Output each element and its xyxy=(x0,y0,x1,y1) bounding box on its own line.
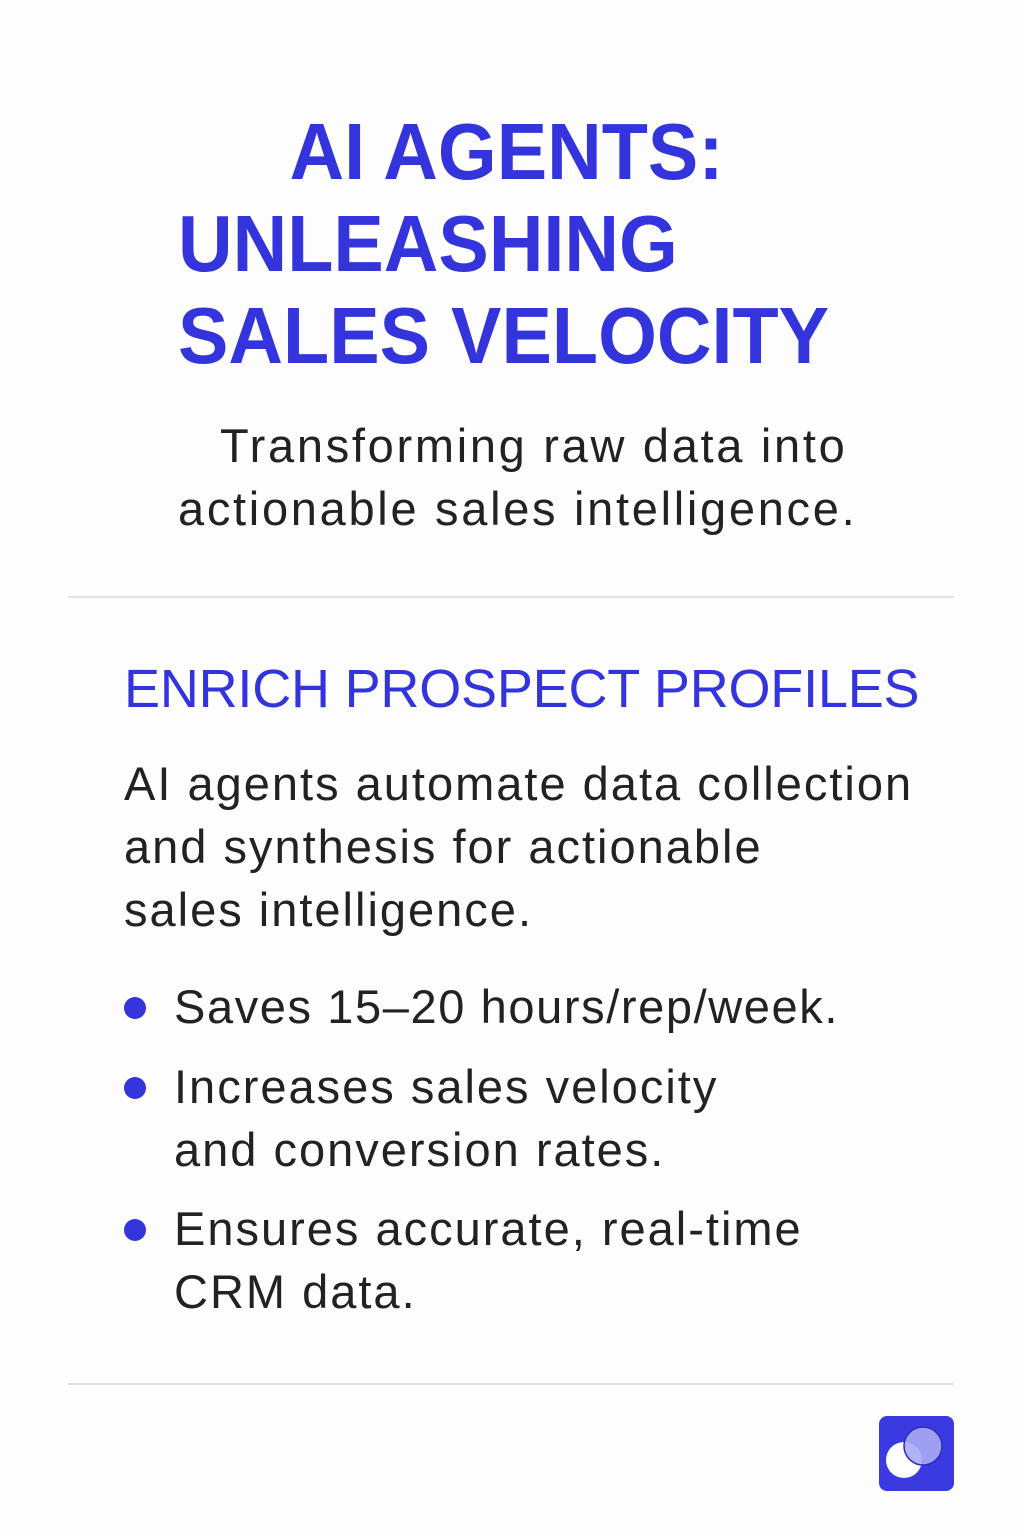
bullet list xyxy=(124,980,839,1318)
title: SALES VELOCITY xyxy=(178,291,829,380)
icon: logo xyxy=(879,1416,954,1491)
body text xyxy=(124,757,913,936)
body text: sales intelligence. xyxy=(124,883,533,936)
title: AI AGENTS: xyxy=(290,107,724,196)
bullet 2 xyxy=(124,1060,718,1176)
bullet 3 xyxy=(124,1202,803,1318)
bullet 3: CRM data. xyxy=(174,1265,417,1318)
body text: and synthesis for actionable xyxy=(124,820,763,873)
bullet 3: Ensures accurate, real-time xyxy=(174,1202,803,1255)
title: UNLEASHING xyxy=(178,199,678,288)
bullet 1: Saves 15–20 hours/rep/week. xyxy=(174,980,839,1033)
title xyxy=(178,107,829,380)
bullet 2: Increases sales velocity xyxy=(174,1060,718,1113)
subtitle xyxy=(178,419,857,535)
subtitle: Transforming raw data into xyxy=(220,419,847,472)
subtitle: actionable sales intelligence. xyxy=(178,482,857,535)
body text: AI agents automate data collection xyxy=(124,757,913,810)
bullet 2: and conversion rates. xyxy=(174,1123,665,1176)
section heading: ENRICH PROSPECT PROFILES xyxy=(124,659,919,719)
